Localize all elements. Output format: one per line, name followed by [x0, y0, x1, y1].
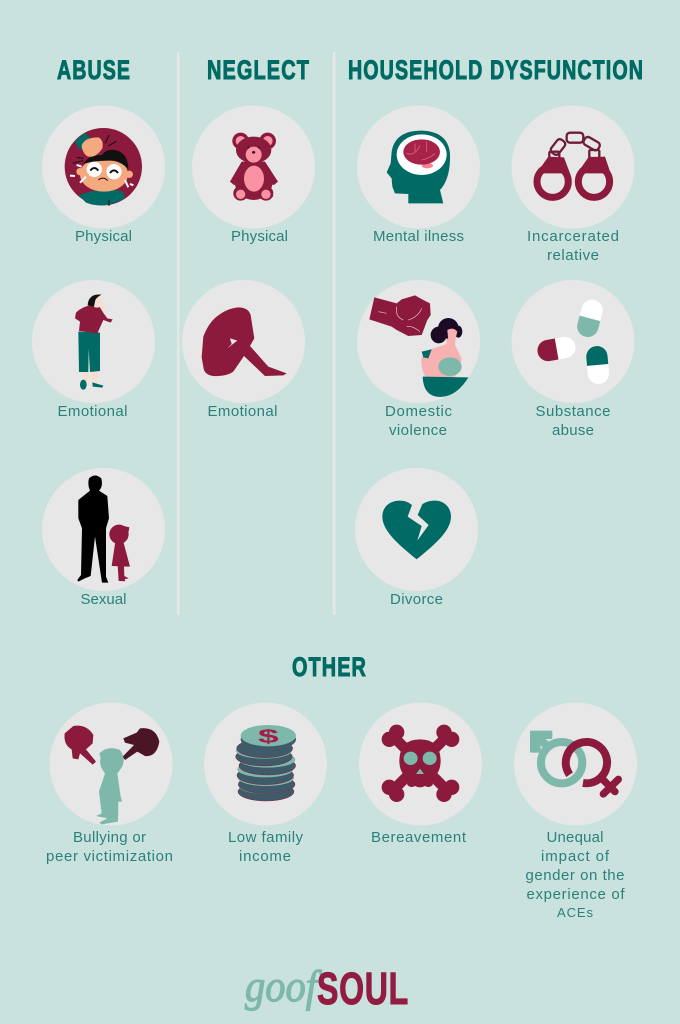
icon: gender symbols — [532, 732, 618, 794]
logo: goofSOUL: SOUL — [317, 963, 409, 1014]
label — [46, 829, 173, 865]
label: gender on the — [526, 867, 624, 884]
icon: head with brain — [387, 131, 450, 203]
panel: household dysfunction — [348, 55, 644, 608]
icon: fist and cowering woman — [369, 295, 468, 397]
label: Bullying or — [73, 829, 146, 846]
panel: other — [46, 652, 637, 920]
icon: stack of coins — [236, 725, 296, 801]
item: divorce — [355, 468, 478, 608]
logo: goofSOUL: goof — [245, 962, 322, 1011]
icon: shouting woman — [75, 295, 113, 390]
heading: other: OTHER — [292, 652, 367, 682]
label: income — [239, 848, 291, 865]
label: violence — [389, 422, 447, 439]
label: Incarcerated — [527, 228, 619, 245]
label — [536, 403, 610, 439]
item: bereavement — [359, 702, 482, 846]
icon: handcuffs — [537, 133, 611, 197]
heading: abuse: ABUSE — [57, 55, 131, 85]
item: mental illness — [357, 106, 480, 245]
dollar sign: $ — [258, 725, 280, 746]
item: incarcerated relative — [512, 106, 634, 264]
label: abuse — [552, 422, 594, 439]
label: Divorce — [390, 591, 443, 608]
label: relative — [547, 247, 599, 264]
item: domestic violence — [357, 280, 480, 439]
label: Substance — [536, 403, 610, 420]
icon: teddy bear — [230, 133, 278, 201]
item: low family income — [204, 702, 327, 865]
label: Mental ilness — [373, 228, 464, 245]
heading: neglect: NEGLECT — [207, 55, 310, 85]
label: Physical — [231, 228, 288, 245]
item: emotional neglect — [182, 280, 305, 420]
label: Physical — [75, 228, 132, 245]
icon: skull and crossbones — [382, 725, 459, 802]
item: unequal impact of gender — [514, 702, 637, 920]
label — [526, 829, 625, 920]
item: physical neglect — [192, 106, 315, 245]
item: sexual abuse — [42, 468, 165, 608]
logo: goofSOUL — [245, 962, 409, 1014]
label: Bereavement — [371, 829, 467, 846]
panel: abuse — [32, 55, 165, 608]
icon: broken heart — [382, 501, 451, 559]
icon: adult and child silhouettes — [77, 475, 130, 583]
item: substance abuse — [512, 280, 634, 439]
label: peer victimization — [46, 848, 173, 865]
icon: crying child hit on the head — [65, 128, 142, 206]
label: experience of — [526, 886, 625, 903]
icon: pointing hands and child — [64, 726, 159, 824]
icon: sitting figure silhouette — [202, 307, 287, 376]
label: Sexual — [80, 591, 126, 608]
icon: pills — [536, 297, 610, 385]
label: Emotional — [58, 403, 128, 420]
item: emotional abuse — [32, 280, 155, 420]
label — [527, 228, 619, 264]
label — [385, 403, 452, 439]
panel: neglect — [182, 55, 315, 420]
label: Low family — [228, 829, 304, 846]
label — [228, 829, 304, 865]
label: ACEs — [557, 905, 594, 920]
label: Emotional — [208, 403, 278, 420]
item: physical abuse — [42, 106, 165, 245]
label: Domestic — [385, 403, 452, 420]
label: impact of — [541, 848, 610, 865]
item: bullying — [46, 702, 173, 865]
label: Unequal — [546, 829, 604, 846]
